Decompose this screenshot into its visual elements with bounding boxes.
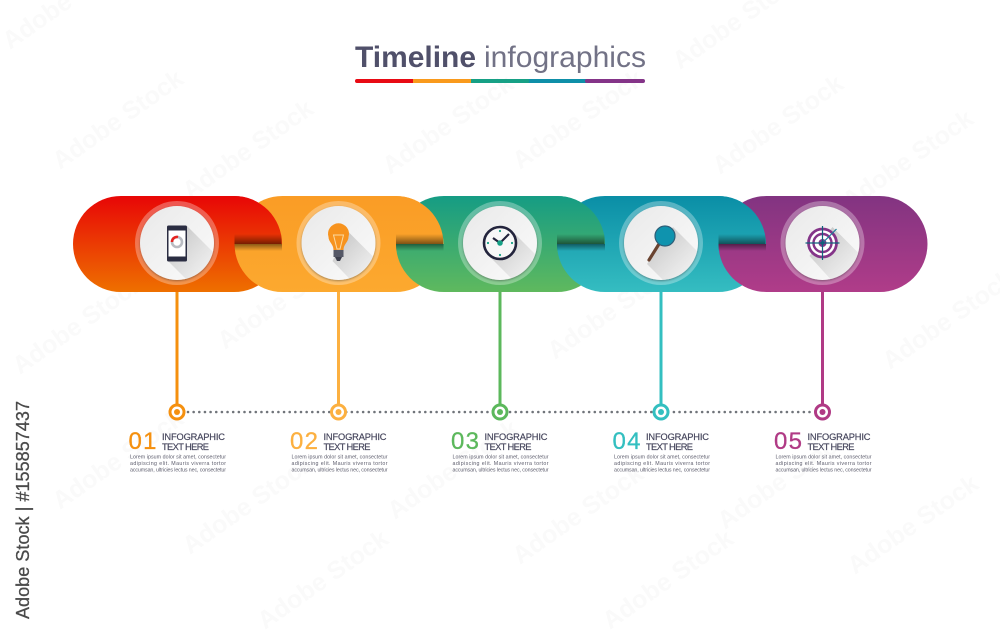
step 02 text: TEXT HERE (324, 442, 370, 452)
step 04 text: INFOGRAPHIC (646, 432, 709, 442)
step 05 text: accumsan, ultricies lectus nec, consectetur (776, 468, 872, 474)
step 01 text: accumsan, ultricies lectus nec, consectetur (130, 468, 226, 474)
title (355, 41, 646, 74)
step 04 text: TEXT HERE (646, 442, 693, 452)
step 05 text: 05 (774, 428, 802, 455)
step 05 text: TEXT HERE (808, 442, 854, 452)
step 03 text: accumsan, ultricies lectus nec, consectetur (452, 468, 549, 474)
segment 1 base (73, 196, 282, 292)
watermark pattern: Adobe Stock (377, 69, 519, 180)
interlocking timeline band (73, 196, 928, 292)
step 04 text: 04 (612, 428, 640, 455)
step 03 text (451, 428, 549, 474)
icon: light bulb (296, 201, 384, 288)
step 02 text: INFOGRAPHIC (324, 432, 387, 442)
segment 3 upper cap over segment 4 (553, 196, 605, 244)
step 01 text (128, 428, 226, 474)
step 01 text: TEXT HERE (162, 442, 209, 452)
segment 4 base (557, 196, 766, 292)
watermark pattern: Adobe Stock (597, 524, 739, 634)
segment 3 base (396, 196, 605, 292)
step 03 text: Lorem ipsum dolor sit amet, consectetur (452, 454, 549, 460)
step 03 text: adipiscing elit. Mauris viverra tortor (452, 461, 549, 467)
step 03 text: 03 (451, 428, 479, 455)
step 04 text (612, 428, 710, 474)
title: infographics (484, 41, 646, 74)
icon: magnifier (619, 201, 706, 288)
connector dotted line (188, 411, 815, 413)
segment 4 upper cap over segment 5 (714, 196, 766, 244)
watermark pattern: Adobe Stock (842, 469, 984, 580)
title underline (355, 79, 645, 83)
watermark pattern: Adobe Stock (507, 459, 649, 570)
step 01 text: INFOGRAPHIC (162, 432, 225, 442)
watermark pattern: Adobe Stock (47, 64, 189, 175)
step 05 text: Lorem ipsum dolor sit amet, consectetur (776, 454, 872, 460)
icon: clock (458, 201, 545, 288)
watermark pattern: Adobe Stock (252, 524, 394, 634)
step 01 text: adipiscing elit. Mauris viverra tortor (130, 461, 226, 467)
watermark pattern: Adobe Stock (177, 94, 319, 205)
step 02 text: adipiscing elit. Mauris viverra tortor (292, 461, 388, 467)
watermark pattern: Adobe Stock (837, 104, 979, 215)
icon: smartphone (135, 201, 222, 288)
watermark pattern: Adobe Stock (712, 424, 854, 535)
watermark pattern: Adobe Stock (707, 69, 849, 180)
step 02 text: Lorem ipsum dolor sit amet, consectetur (292, 454, 388, 460)
step 05 text: INFOGRAPHIC (808, 432, 871, 442)
step 02 text: 02 (290, 428, 318, 455)
step 04 text: Lorem ipsum dolor sit amet, consectetur (614, 454, 710, 460)
joint shadows (234, 234, 766, 251)
watermark pattern: Adobe Stock (507, 64, 649, 175)
watermark pattern: Adobe Stock (542, 254, 684, 365)
vertical stems and nodes (170, 290, 830, 419)
step 04 text: adipiscing elit. Mauris viverra tortor (614, 461, 710, 467)
title: Timeline (355, 41, 476, 74)
step 04 text: accumsan, ultricies lectus nec, consectetur (614, 468, 710, 474)
step 01 text: Lorem ipsum dolor sit amet, consectetur (130, 454, 226, 460)
watermark pattern: Adobe Stock (47, 404, 189, 515)
step 01 text: 01 (128, 428, 156, 455)
step 02 text (290, 428, 388, 474)
icon: target (780, 201, 868, 288)
segment 2 upper cap over segment 3 (392, 196, 444, 244)
watermark pattern: Adobe Stock (7, 269, 149, 380)
watermark pattern: Adobe Stock (382, 414, 524, 525)
step 03 text: INFOGRAPHIC (484, 432, 548, 442)
stock credit: Adobe Stock | #155857437 (13, 401, 33, 619)
step 05 text: adipiscing elit. Mauris viverra tortor (776, 461, 872, 467)
step 03 text: TEXT HERE (484, 442, 532, 452)
step 02 text: accumsan, ultricies lectus nec, consectetur (292, 468, 388, 474)
step 05 text (774, 428, 872, 474)
watermark pattern: Adobe Stock (177, 449, 319, 560)
segment 1 upper cap over segment 2 (230, 196, 282, 244)
segment 2 base (234, 196, 444, 292)
segment 5 base (718, 196, 928, 292)
watermark pattern: Adobe Stock (212, 244, 354, 355)
